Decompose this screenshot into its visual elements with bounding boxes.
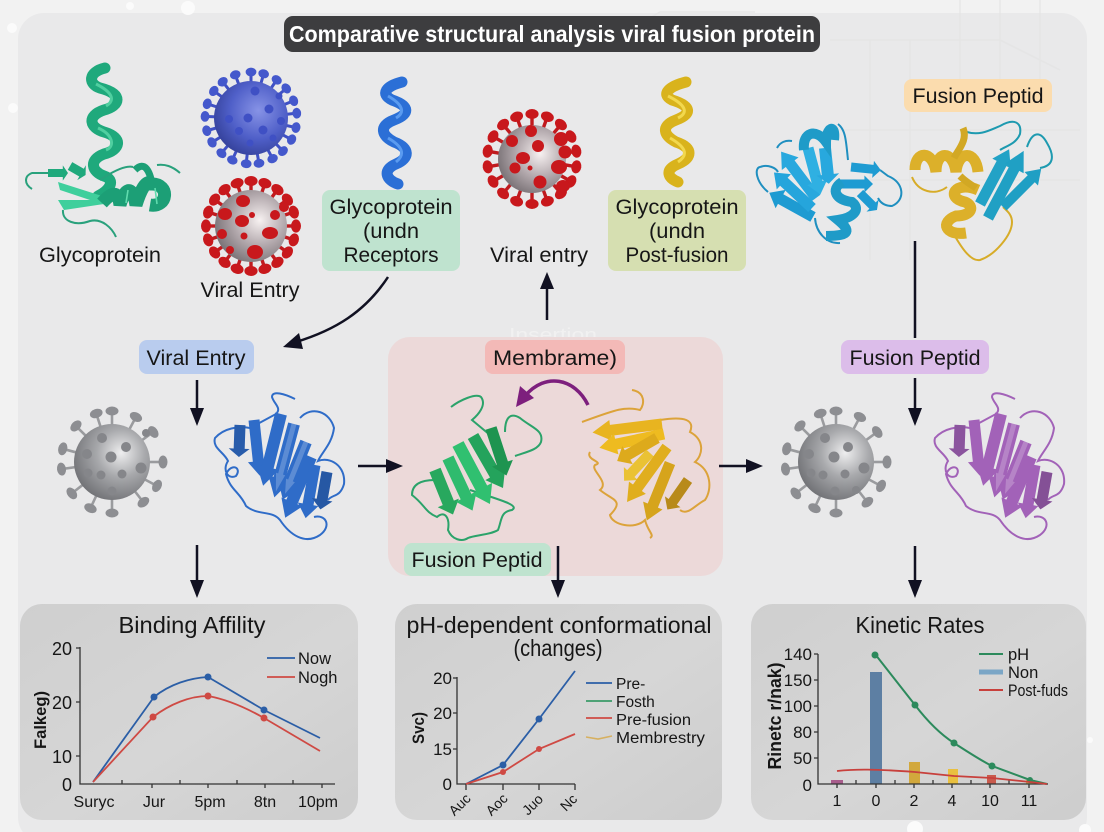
legend: Pre-: [616, 676, 645, 693]
x axis labels: [445, 790, 580, 819]
chart title: Kinetic Rates: [856, 612, 984, 638]
callout: Membrame: [485, 340, 625, 374]
arrow: down right middle: [908, 378, 922, 426]
y axis labels: 0: [62, 775, 72, 795]
green series: [872, 652, 1047, 784]
legend: pH: [1008, 646, 1029, 664]
protein: yellow and cyan fold: [912, 122, 1052, 260]
y axis title: Rinetc r/nak): [765, 662, 785, 770]
callout: Fusion Peptid orange: Fusion Peptid: [912, 85, 1044, 108]
x axis labels: 8tn: [254, 794, 276, 811]
callout: Fusion Peptid green: Fusion Peptid: [412, 549, 542, 572]
icon: red virus: [201, 176, 301, 276]
y axis labels: 20: [52, 693, 72, 713]
icon: pearl red virus: [482, 109, 582, 209]
callout: Viral Entry blue: Viral Entry: [146, 347, 246, 370]
x axis labels: 10pm: [298, 794, 338, 811]
x axis labels: Aoc: [482, 790, 511, 819]
red series: [837, 770, 1047, 784]
legend: Fosth: [616, 694, 655, 711]
x axis labels: 2: [910, 793, 919, 810]
legend: [979, 646, 1068, 700]
axes: [814, 654, 1048, 788]
x axis labels: 4: [948, 793, 957, 810]
y axis labels: 15: [433, 740, 452, 759]
y axis labels: 150: [784, 671, 812, 690]
y axis title: Falkeg): [31, 691, 50, 749]
callout: Glycoprotein Receptors: (undn: [363, 220, 419, 243]
callout: Glycoprotein Post-fusion: [608, 190, 746, 271]
y axis labels: 50: [793, 749, 812, 768]
protein: green fold: [412, 396, 541, 540]
legend: Now: [298, 650, 331, 668]
callout: Glycoprotein Receptors: [322, 190, 460, 271]
protein: blue helix: [383, 82, 406, 184]
legend: Post-fuds: [1008, 682, 1068, 700]
x axis labels: Suryc: [74, 794, 114, 811]
red series: [466, 734, 575, 784]
protein: purple sheet: [935, 393, 1064, 539]
panel: membrane: [388, 337, 723, 576]
y axis labels: 0: [803, 776, 812, 795]
icon: blue virus: [200, 68, 302, 169]
callout: Membrame: Membrame): [493, 347, 617, 370]
y axis labels: [433, 669, 452, 794]
arrow: down to chart 1: [190, 545, 204, 598]
panel: pH conformational chart: [395, 604, 722, 820]
y axis labels: 100: [784, 697, 812, 716]
callout: Glycoprotein Post-fusion: (undn: [649, 220, 705, 243]
arrow: fusion line down: [914, 241, 916, 338]
protein: blue sheet: [215, 393, 344, 539]
chart title: (changes): [514, 635, 602, 661]
protein: green glycoprotein: [26, 68, 180, 237]
legend: Non: [1008, 664, 1038, 682]
ghost caption: Insertion: [509, 325, 597, 345]
axes: [453, 677, 575, 790]
y axis labels: 0: [443, 775, 452, 794]
x axis labels: [833, 793, 1037, 810]
arrow: right into membrane: [358, 459, 403, 473]
axes: [76, 647, 335, 788]
bars: [831, 672, 1035, 784]
faint circuit lines: [630, 0, 1080, 260]
title: [284, 16, 820, 52]
arrow: down left middle: [190, 380, 204, 426]
callout: Fusion Peptid orange: [904, 79, 1052, 112]
arrow: purple curved: [516, 381, 588, 407]
chart title: pH-dependent conformational: [406, 612, 712, 638]
x axis labels: [74, 794, 338, 811]
x axis labels: 5pm: [194, 794, 226, 811]
y axis labels: 80: [793, 723, 812, 742]
protein: yellow helix: [665, 82, 689, 182]
panel: kinetic rates chart: [751, 604, 1086, 820]
callout: Viral Entry blue: [139, 340, 254, 374]
callout: Glycoprotein Receptors: Receptors: [344, 244, 438, 267]
icon: grey virus right: [780, 406, 892, 518]
legend: Nogh: [298, 669, 337, 687]
label: Viral Entry: Viral Entry: [200, 279, 300, 302]
x axis labels: 0: [872, 793, 881, 810]
callout: Fusion Peptid purple: [841, 340, 989, 374]
legend: Pre-fusion: [616, 712, 691, 729]
y axis labels: 10: [52, 747, 72, 767]
y axis labels: 140: [784, 645, 812, 664]
blue series: [93, 674, 320, 782]
legend: [586, 676, 705, 747]
callout: Glycoprotein Receptors: Glycoprotein: [330, 196, 452, 219]
red series: [93, 692, 320, 782]
y axis title: Svc): [409, 712, 428, 744]
x axis labels: 11: [1021, 793, 1037, 810]
arrow: receptors to viral entry: [283, 277, 388, 349]
title: Comparative structural analysis viral fusion protein: [289, 21, 815, 47]
legend: [267, 650, 337, 687]
x axis labels: Jur: [143, 794, 166, 811]
x axis labels: Auc: [445, 790, 474, 819]
label: Viral entry: Viral entry: [490, 244, 589, 267]
x axis labels: Nc: [557, 791, 580, 814]
chart title: Binding Affility: [118, 612, 266, 638]
y axis labels: 20: [433, 704, 452, 723]
x axis labels: 10: [981, 793, 999, 810]
arrow: up to viral entry: [540, 272, 554, 320]
callout: Fusion Peptid purple: Fusion Peptid: [850, 347, 980, 370]
y axis labels: [52, 639, 72, 795]
label: Glycoprotein: Glycoprotein: [39, 244, 161, 267]
protein: cyan fold: [757, 124, 901, 243]
blue series: [466, 671, 575, 784]
y axis labels: [784, 645, 812, 795]
chart title: [406, 612, 712, 661]
arrow: right out of membrane: [719, 459, 763, 473]
callout: Glycoprotein Post-fusion: Post-fusion: [626, 244, 728, 267]
arrow: down to chart 3: [908, 546, 922, 598]
y axis labels: 20: [433, 669, 452, 688]
x axis labels: Juo: [519, 791, 546, 818]
callout: Fusion Peptid green: [404, 543, 551, 576]
y axis labels: 20: [52, 639, 72, 659]
icon: grey virus left: [56, 406, 168, 518]
arrow: down to chart 2: [551, 546, 565, 598]
legend: Membrestry: [616, 730, 705, 747]
panel: binding affility chart: [20, 604, 358, 820]
callout: Glycoprotein Post-fusion: Glycoprotein: [616, 196, 738, 219]
x axis labels: 1: [833, 793, 842, 810]
protein: yellow fold: [582, 390, 709, 538]
